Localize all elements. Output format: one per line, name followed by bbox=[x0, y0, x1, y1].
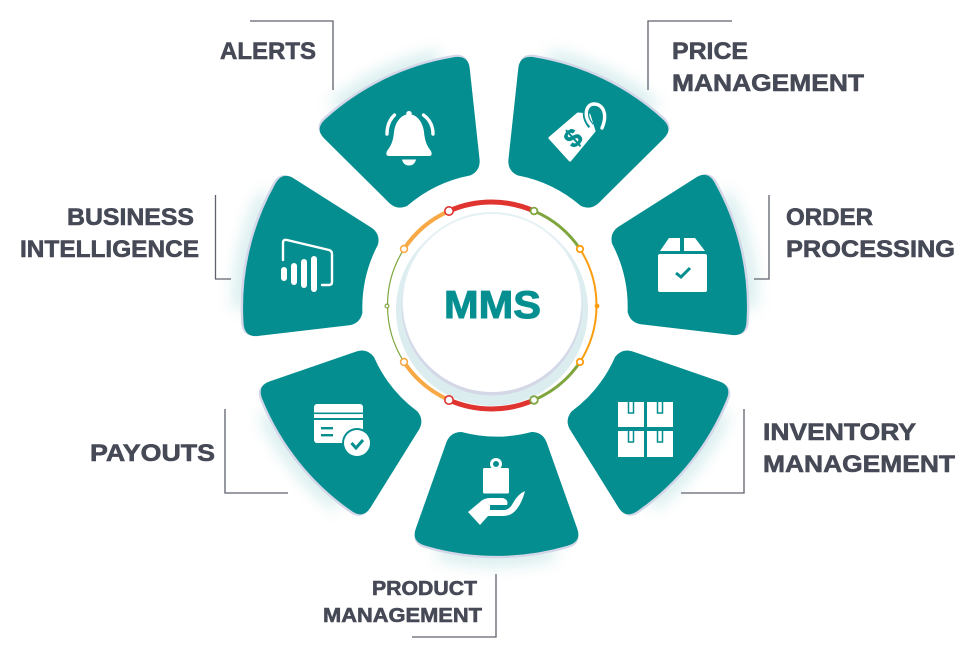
leader: inventory management bbox=[681, 409, 744, 493]
icon: power bi chart bbox=[281, 240, 332, 292]
leader: business intelligence bbox=[216, 195, 231, 279]
leader: order processing bbox=[754, 195, 769, 279]
label: inventory management bbox=[763, 419, 955, 478]
label: price management bbox=[672, 38, 864, 97]
panel: petal product management bbox=[415, 432, 578, 559]
panel: petal price management bbox=[475, 41, 678, 226]
icon: price tag: $ bbox=[558, 122, 589, 154]
label: inventory management: INVENTORY bbox=[763, 419, 916, 446]
label: business intelligence bbox=[20, 204, 199, 263]
icon: stacked boxes bbox=[618, 402, 673, 457]
icon: hand holding bag bbox=[468, 460, 525, 525]
label: business intelligence: BUSINESS bbox=[67, 204, 194, 231]
label: payouts: PAYOUTS bbox=[90, 440, 215, 467]
label: product management: MANAGEMENT bbox=[323, 605, 482, 627]
center hub bbox=[396, 212, 588, 406]
label: price management: MANAGEMENT bbox=[672, 70, 864, 97]
panel: petal payouts bbox=[246, 320, 447, 527]
panel: petal inventory management bbox=[542, 320, 743, 527]
icon: bell bbox=[386, 111, 433, 166]
panel: petal alerts bbox=[310, 41, 513, 226]
label: price management: PRICE bbox=[672, 38, 748, 65]
label: product management: PRODUCT bbox=[372, 578, 477, 600]
label: order processing: ORDER bbox=[786, 204, 873, 231]
label: order processing: PROCESSING bbox=[786, 236, 955, 263]
label: alerts: ALERTS bbox=[220, 38, 316, 65]
leader: alerts bbox=[250, 21, 333, 90]
leader: product management bbox=[412, 574, 496, 637]
icon: parcel box bbox=[658, 238, 707, 292]
label: product management bbox=[323, 578, 482, 627]
status ring bbox=[385, 202, 599, 409]
label: order processing bbox=[786, 204, 955, 263]
leader: payouts bbox=[225, 409, 288, 493]
icon: price tag bbox=[550, 104, 605, 160]
icon: payment card with check bbox=[314, 404, 372, 458]
center title: MMS bbox=[444, 284, 541, 327]
leader: price management bbox=[648, 21, 732, 90]
panel: petal business intelligence bbox=[228, 171, 388, 359]
panel: petal order processing bbox=[602, 170, 762, 358]
label: inventory management: MANAGEMENT bbox=[763, 451, 955, 478]
label: business intelligence: INTELLIGENCE bbox=[20, 236, 199, 263]
